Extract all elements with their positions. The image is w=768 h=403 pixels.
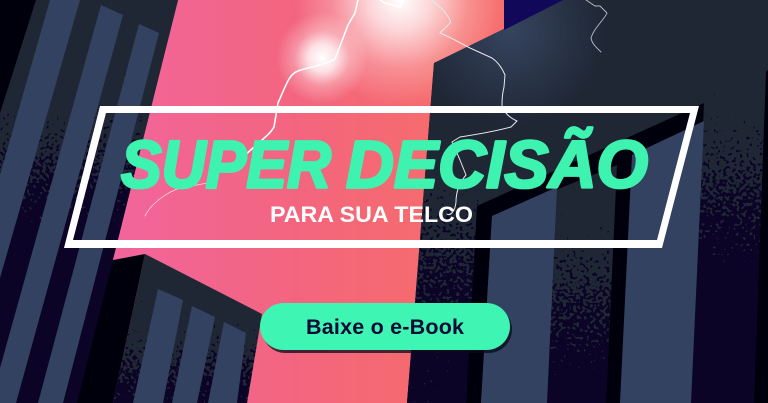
title frame — [64, 106, 699, 248]
button: Baixe o e-Book: Baixe o e-Book — [306, 315, 464, 339]
building: right tower — [400, 0, 768, 403]
title: SUPER DECISÃO — [121, 128, 648, 202]
building: lower left tower — [77, 254, 270, 403]
sliver of night sky above right tower — [504, 0, 563, 30]
title: SUPER DECISÃO: SUPER — [121, 128, 331, 202]
title: SUPER DECISÃO: DECISÃO — [346, 128, 648, 202]
button: Baixe o e-Book — [260, 303, 512, 353]
panel: pink sky with lightning glow — [113, 0, 510, 403]
lightning bolts — [145, 0, 607, 216]
building: left tower — [0, 0, 180, 403]
subtitle: PARA SUA TELCO: PARA SUA TELCO — [270, 202, 473, 227]
